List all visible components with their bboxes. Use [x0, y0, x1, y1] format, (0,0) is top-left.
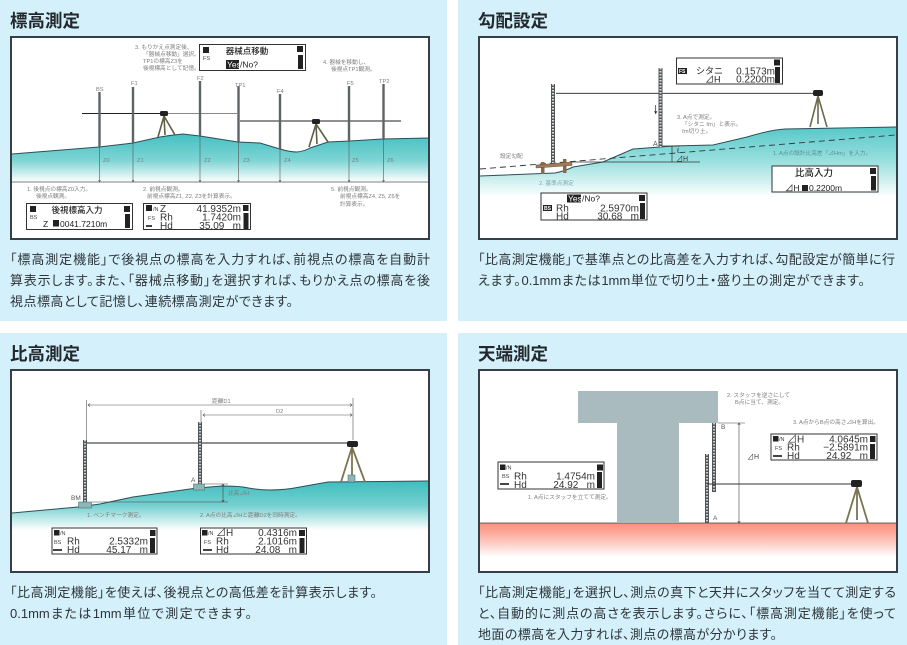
notes: 「器械点移動」選択。: [143, 50, 200, 58]
sight lines: [82, 114, 401, 121]
staff BM: [83, 440, 87, 502]
ground: [12, 134, 428, 182]
text block: 標高測定: 「標高測定機能」で後視点の標高を入力すれば、前視点の標高を自動計: [10, 252, 430, 267]
design slope dashed line: [480, 135, 896, 169]
sight line: [556, 92, 815, 94]
display: BS Rh Hd: 2.5332m: [109, 536, 148, 548]
display: dH Rh Hd: Rh: [787, 442, 800, 454]
labels: 設定勾配: [500, 152, 523, 160]
notes: 計算表示。: [340, 200, 368, 208]
sight line: [707, 483, 853, 485]
heading: 勾配設定: 勾配設定: [478, 10, 548, 30]
floor: [480, 523, 896, 557]
notes: 2. 前視点観測。: [143, 185, 183, 193]
text block: 標高測定: 算表示します。また、「器械点移動」を選択すれば、もりかえ点の標高を後: [10, 273, 430, 288]
display: シタニ: [676, 58, 782, 86]
labels: A: [191, 477, 196, 484]
display: Yes/No Rh Hd: Yes: [568, 194, 582, 204]
text block: 勾配設定: [478, 252, 895, 288]
display: BS Rh Hd: Hd: [67, 545, 80, 556]
display: Z Rh Hd: 1.7420m: [202, 212, 241, 224]
display: Yes/No Rh Hd: Rh: [556, 204, 569, 214]
display: Yes/No Rh Hd: Hd: [556, 212, 569, 222]
diagram: 標高測定: [10, 36, 430, 240]
notes: 4. 器械を移動し、: [323, 58, 369, 66]
distance arrows: [86, 398, 353, 440]
diagram: 比高測定: [10, 369, 430, 573]
labels: 1. ベンチマーク測定。: [87, 511, 145, 519]
display: dH Rh Hd: 24.08 m: [255, 545, 297, 556]
heading: 比高測定: 比高測定: [10, 344, 80, 364]
display: BS Rh Hd: [498, 462, 604, 491]
text block: 比高測定: 「比高測定機能」を使えば、後視点との高低差を計算表示します。: [10, 585, 377, 600]
labels: 1. A点にスタッフを立てて測定。: [528, 493, 612, 501]
notes: 1. 後視点の標高Z0入力。: [27, 185, 91, 193]
height labels: Z4: [284, 158, 291, 164]
height labels: Z5: [352, 158, 359, 164]
labels: 「シタニ ℓm」と表示。: [682, 120, 741, 128]
display: dH Rh Hd: FS: [775, 446, 782, 452]
labels: 2. スタッフを逆さにして: [727, 391, 790, 399]
height labels: Z0: [103, 158, 110, 164]
diagram: 勾配設定: [478, 36, 898, 240]
display: BS Rh Hd: /N: [506, 466, 512, 472]
heading: 天端測定: 天端測定: [478, 344, 548, 364]
notes: 後視点観測。: [36, 192, 70, 200]
icon: tripod 1: [158, 111, 175, 137]
display: 器械点移動: /No?: [240, 60, 258, 70]
T-shaped structure: [578, 391, 718, 523]
labels: B点に当て、測定。: [735, 398, 784, 406]
height difference lines: [92, 484, 228, 502]
distance labels: [212, 397, 283, 415]
labels: ℓ: [676, 148, 680, 155]
ground: [12, 481, 428, 530]
panel: 比高測定: [0, 333, 447, 645]
labels: 3. A点で測定。: [677, 113, 715, 121]
text block: 比高測定: [10, 585, 377, 621]
display: dH Rh Hd: Hd: [216, 545, 229, 556]
text block: 比高測定: 0.1mmまたは1mm単位で測定できます。: [10, 606, 252, 621]
display: dH Rh Hd: −2.5891m: [823, 442, 868, 454]
reference lines: [571, 146, 700, 162]
labels: [528, 391, 879, 522]
height labels: Z3: [243, 158, 250, 164]
labels: A: [653, 141, 658, 148]
notes: 5. 前視点観測。: [331, 185, 371, 193]
display: 後視標高入力: BS: [30, 215, 38, 221]
text block: 天端測定: と、自動的に測点の高さを表示します。さらに、「標高測定機能」を使って: [478, 606, 896, 621]
display: Z Rh Hd: /N: [153, 207, 159, 213]
staff labels: F4: [277, 89, 284, 95]
staff labels: BS: [96, 87, 104, 93]
display: Z Rh Hd: FS: [148, 216, 155, 222]
labels: 比高⊿H: [228, 489, 249, 497]
wooden stake: [536, 159, 572, 174]
display: Yes/No Rh Hd: 2.5970m: [600, 204, 639, 214]
icon: tripod 2: [309, 119, 328, 147]
display: Yes/No Rh Hd: /No?: [582, 194, 600, 204]
display: dH Rh Hd: [200, 527, 306, 556]
display: dH Rh Hd: 24.92 m: [826, 451, 868, 462]
height labels: Z1: [137, 158, 144, 164]
display: BS Rh Hd: BS: [54, 540, 62, 546]
display: Yes/No Rh Hd: 30.68 m: [597, 212, 639, 222]
text block: 勾配設定: 「比高測定機能」で基準点との比高差を入力すれば、勾配設定が簡単に行: [478, 252, 895, 267]
distance labels: 距離D1: [212, 397, 231, 405]
display: 後視標高入力: [26, 204, 132, 230]
labels: [500, 113, 871, 187]
height arrows: [98, 136, 384, 182]
staff labels: F1: [131, 81, 138, 87]
display: dH Rh Hd: ⊿H: [787, 434, 804, 446]
display: Z Rh Hd: Hd: [160, 221, 173, 232]
display: シタニ: ⊿H: [705, 74, 720, 84]
heading: 標高測定: 標高測定: [10, 10, 80, 30]
display: 比高入力: 0.2200m: [809, 183, 842, 193]
display: 器械点移動: Yes: [227, 60, 241, 70]
staff labels: F2: [197, 76, 204, 82]
icon: level and tripod: [341, 441, 365, 482]
display: シタニ: シタニ: [696, 66, 723, 76]
distance labels: D2: [276, 409, 283, 415]
labels: B: [721, 424, 725, 431]
display: 器械点移動: [200, 44, 306, 70]
display: dH Rh Hd: Rh: [216, 536, 229, 548]
display: dH Rh Hd: [771, 434, 877, 462]
labels: 2. A点の比高⊿Hと距離D2を同時測定。: [200, 511, 301, 519]
staff labels: TP1: [235, 83, 245, 89]
display: dH Rh Hd: ⊿H: [216, 527, 233, 539]
text block: 天端測定: 地面の標高を入力すれば、測点の標高が分かります。: [478, 627, 777, 642]
panel: 標高測定: [0, 0, 447, 321]
display: 器械点移動: FS: [203, 56, 210, 62]
sight line: [86, 442, 347, 444]
display: Z Rh Hd: Z: [160, 204, 166, 215]
display: 後視標高入力: 0041.7210m: [60, 219, 107, 229]
display: dH Rh Hd: 0.4316m: [258, 528, 297, 539]
labels: ⊿H: [676, 155, 688, 163]
display: BS Rh Hd: /N: [60, 531, 66, 537]
panel: 勾配設定: [458, 0, 907, 321]
diagram: 天端測定: [478, 369, 898, 573]
display: dH Rh Hd: 2.1016m: [258, 536, 297, 548]
display: 後視標高入力: Z: [43, 219, 48, 229]
staff A: [705, 454, 709, 523]
display: dH Rh Hd: /N: [208, 531, 214, 537]
height arrow: [718, 423, 745, 523]
display: dH Rh Hd: Hd: [787, 451, 800, 462]
display: 器械点移動: 器械点移動: [226, 46, 268, 56]
text block: 天端測定: [478, 585, 896, 642]
display: BS Rh Hd: 24.92 m: [553, 480, 595, 491]
labels: BM: [71, 495, 81, 502]
display: BS Rh Hd: 45.17 m: [106, 545, 148, 556]
ground: [480, 127, 896, 197]
notes: 後視点TP1観測。: [331, 65, 376, 73]
display: BS Rh Hd: BS: [502, 474, 510, 480]
labels: A: [713, 515, 718, 522]
display: 比高入力: [772, 166, 878, 193]
text block: 勾配設定: えます。0.1mmまたは1mm単位で切り土・盛り土の測定ができます。: [478, 273, 865, 288]
labels: 3. A点からB点の高さ⊿Hを算出。: [793, 418, 879, 426]
height labels: Z6: [387, 158, 394, 164]
display: BS Rh Hd: Rh: [67, 536, 80, 548]
staffs: [100, 81, 384, 149]
staff A: [198, 422, 202, 484]
labels: [71, 477, 301, 519]
notes: [27, 43, 401, 208]
display: dH Rh Hd: 4.0645m: [829, 434, 868, 446]
display: BS Rh Hd: 1.4754m: [556, 472, 595, 482]
height labels: Z2: [204, 158, 211, 164]
text block: 標高測定: [10, 252, 430, 309]
staff middle: [658, 68, 662, 147]
icon: level and tripod: [846, 480, 868, 523]
labels: 1. A点の設計比高差「⊿Hm」を入力。: [773, 149, 871, 157]
notes: TP1の標高Z3を: [143, 57, 183, 65]
display: Z Rh Hd: 41.9352m: [197, 204, 241, 215]
display: 後視標高入力: 後視標高入力: [51, 205, 103, 215]
display: dH Rh Hd: FS: [204, 540, 211, 546]
staff labels: F5: [347, 81, 354, 87]
display: BS Rh Hd: [52, 528, 157, 556]
display: BS Rh Hd: Hd: [514, 480, 527, 491]
display: シタニ: 0.2200m: [736, 74, 775, 86]
display: シタニ: 0.1573m: [736, 66, 775, 78]
notes: 後視標高として記憶。: [143, 64, 200, 72]
display: Z Rh Hd: [144, 204, 250, 232]
notes: 3. もりかえ点測定後、: [135, 43, 193, 51]
height labels: [103, 158, 394, 164]
text block: 天端測定: 「比高測定機能」を選択し、測点の真下と天井にスタッフを当てて測定する: [478, 585, 896, 600]
notes: 前視点標高Z4, Z5, Z6を: [340, 192, 401, 200]
text block: 標高測定: 視点標高として記憶し、連続標高測定ができます。: [10, 294, 293, 309]
display: 比高入力: ⊿H: [785, 183, 800, 193]
display: Yes/No Rh Hd: BS: [544, 206, 552, 212]
display: Z Rh Hd: 35.09 m: [199, 221, 241, 232]
staff B: [712, 423, 716, 492]
icon: level and tripod: [810, 90, 827, 127]
panel: 天端測定: [458, 333, 907, 645]
base blocks: [78, 475, 355, 508]
staff left: [551, 84, 555, 163]
display: BS Rh Hd: Rh: [514, 472, 527, 482]
labels: 2. 基準点測定: [539, 179, 574, 187]
display: シタニ: FS: [679, 69, 686, 75]
small arrow: [654, 105, 657, 114]
labels: ⊿H: [747, 453, 759, 461]
labels: ℓm切り土。: [682, 127, 711, 135]
display: Z Rh Hd: Rh: [160, 212, 173, 224]
staff labels: TP2: [379, 79, 389, 85]
display: dH Rh Hd: /N: [779, 437, 785, 443]
staff labels: [96, 76, 389, 95]
display: 比高入力: 比高入力: [795, 167, 833, 179]
display: Yes/No Rh Hd: [541, 193, 647, 222]
notes: 前視点標高Z1, Z2, Z3を計算表示。: [147, 192, 236, 200]
